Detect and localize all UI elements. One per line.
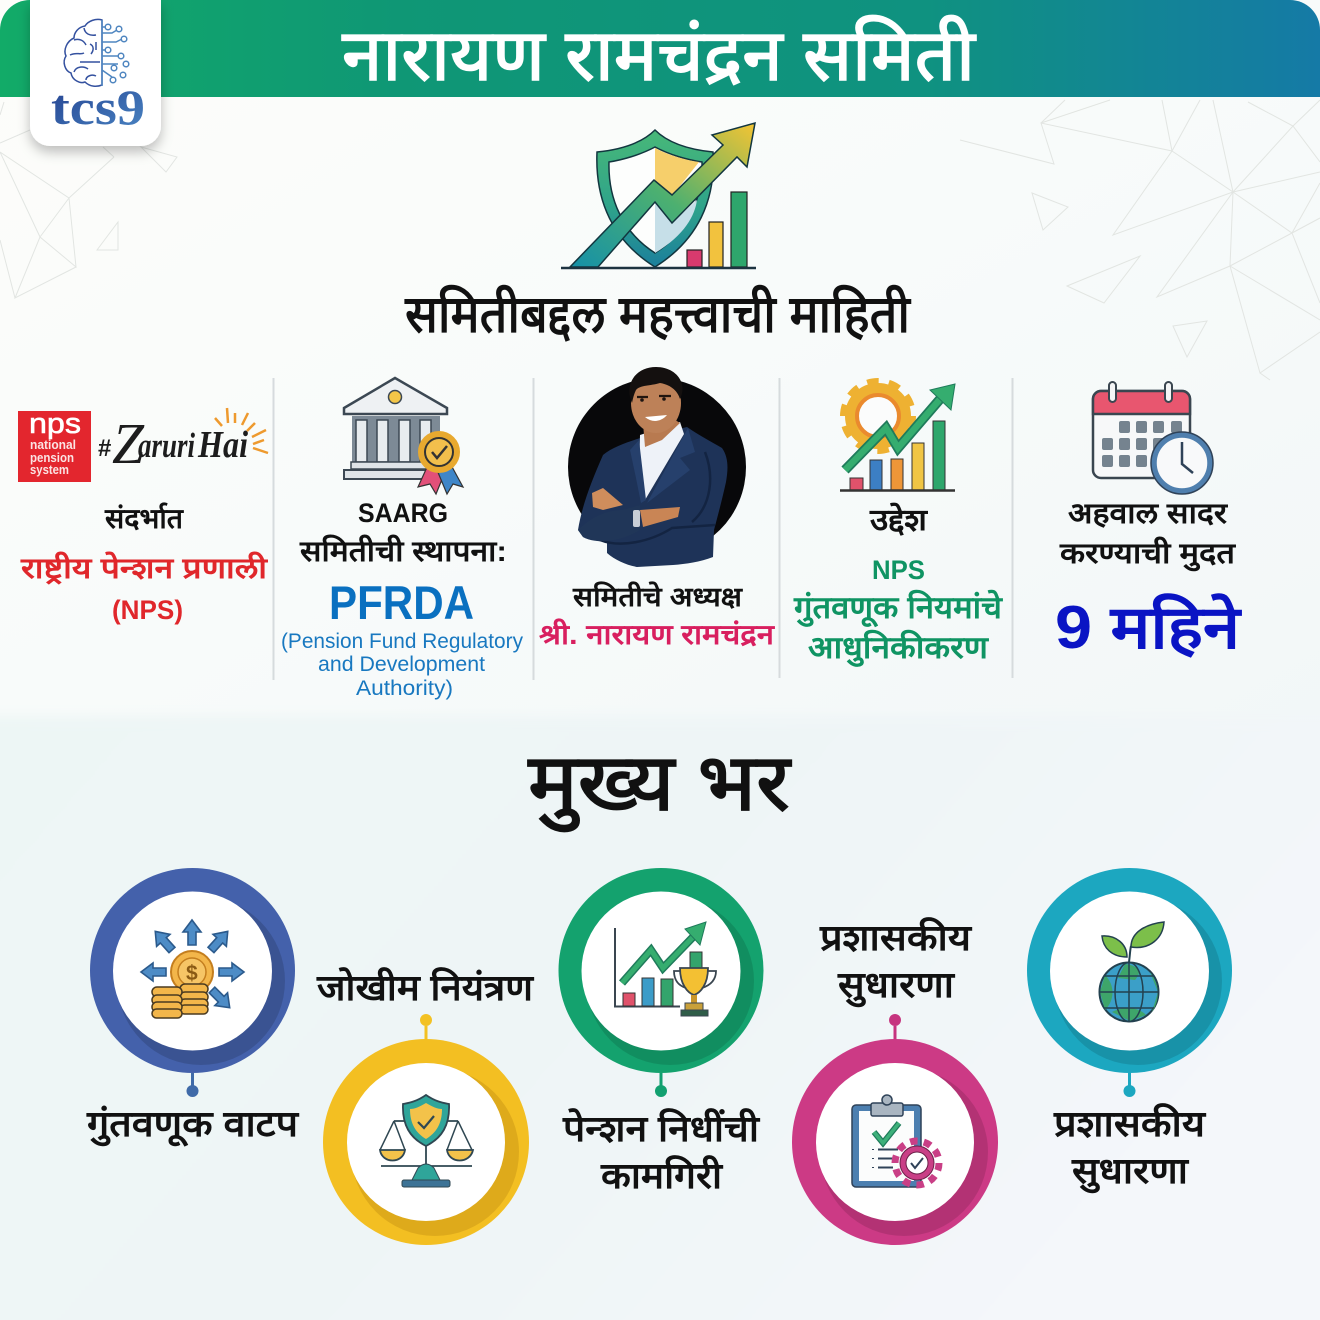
hashtag zaruri hai: Z [112,411,145,476]
label: pension fund performance [562,1108,761,1196]
label: 9 months: 9 महिने [1055,593,1243,661]
label: report submission period [1059,498,1237,572]
label: administrative reform [1053,1103,1206,1194]
panel: chairperson [539,367,776,650]
hashtag zaruri hai: Hai [197,424,248,466]
label: risk control: जोखीम नियंत्रण [316,967,535,1008]
label: PFRDA full name: (Pension Fund Regulatory [281,630,523,653]
label: committee establishment: समितीची स्थापना: [299,534,507,568]
label: national pension system: राष्ट्रीय पेन्शन प्रणाली [20,551,269,585]
label: administrative reform: सुधारणा [1071,1150,1190,1194]
ring: magenta [792,1014,998,1245]
label: pension fund performance: कामगिरी [600,1155,724,1196]
icon: brain circuit [64,19,129,86]
label: PFRDA: PFRDA [329,576,474,629]
logo card [30,0,161,146]
label: NPS: NPS [872,555,925,585]
icon: scales with shield [380,1095,473,1187]
panel: risk control [316,967,535,1245]
label: PFRDA full name [281,630,523,700]
icon: chart and trophy [615,922,716,1016]
icon: nps logo: pension [30,451,74,465]
label: administrative reform: प्रशासकीय [819,917,972,958]
column dividers [274,378,1012,680]
logo wordmark: tcs9 [51,79,145,135]
icon: coins and arrows: $ [186,962,198,985]
label: PFRDA full name: and Development [318,653,485,676]
icon: nps logo: nps [29,408,81,440]
icon: coins and arrows [141,920,244,1018]
label: modernisation of investment rules: आधुनिकीकरण [808,629,990,667]
icon: clipboard and gear [852,1095,939,1187]
label: administrative reform: सुधारणा [837,964,956,1008]
icon: nps logo: system [30,463,69,477]
heading: committee information: समितीबद्दल महत्त्वाची माहिती [405,285,911,344]
ring: yellow [323,1014,529,1245]
icon: nps logo [18,408,91,482]
icon: gear and growth chart [840,383,955,490]
label: NPS: (NPS) [112,595,183,625]
icon: shield with rising arrow [561,123,756,268]
panel: administrative reform right [1027,868,1232,1194]
portrait: chairperson [568,367,746,567]
label: pension fund performance: पेन्शन निधींची [562,1108,761,1149]
label: modernisation of investment rules: गुंतवणूक नियमांचे [793,589,1003,628]
hashtag zaruri hai: aruri [138,426,195,465]
ring: blue [90,868,295,1097]
label: administrative reform [819,917,972,1008]
label: report submission period: करण्याची मुदत [1059,536,1237,572]
label: SAARG: SAARG [358,498,448,528]
icon: globe with leaves [1100,922,1164,1022]
panel: establishment [281,378,523,700]
panel: report deadline [1055,382,1243,661]
label: report submission period: अहवाल सादर [1068,498,1228,530]
heading: main focus: मुख्य भर [528,738,791,832]
icon: nps logo: national [30,438,76,452]
label: PFRDA full name: Authority) [356,677,453,700]
panel: context [18,408,269,625]
title: नारायण रामचंद्रन समिती [342,15,976,96]
hashtag zaruri hai: # [98,435,111,462]
label: modernisation of investment rules [793,589,1003,667]
icon: bank with medal [344,378,463,494]
ring: teal [1027,868,1232,1097]
label: context: संदर्भात [104,502,184,534]
panel: pension fund performance [558,868,764,1196]
panel: administrative reform centre [792,917,998,1245]
header band [0,0,1320,97]
label: objective: उद्देश [869,502,929,537]
label: investment allocation: गुंतवणूक वाटप [86,1103,300,1147]
ring: green [558,868,764,1097]
label: chair name: श्री. नारायण रामचंद्रन [539,618,776,650]
panel: investment allocation [86,868,300,1147]
hashtag zaruri hai [98,408,268,476]
icon: calendar and clock [1093,382,1213,494]
label: administrative reform: प्रशासकीय [1053,1103,1206,1144]
label: committee chair: समितीचे अध्यक्ष [572,581,744,612]
panel: objective [793,383,1003,667]
